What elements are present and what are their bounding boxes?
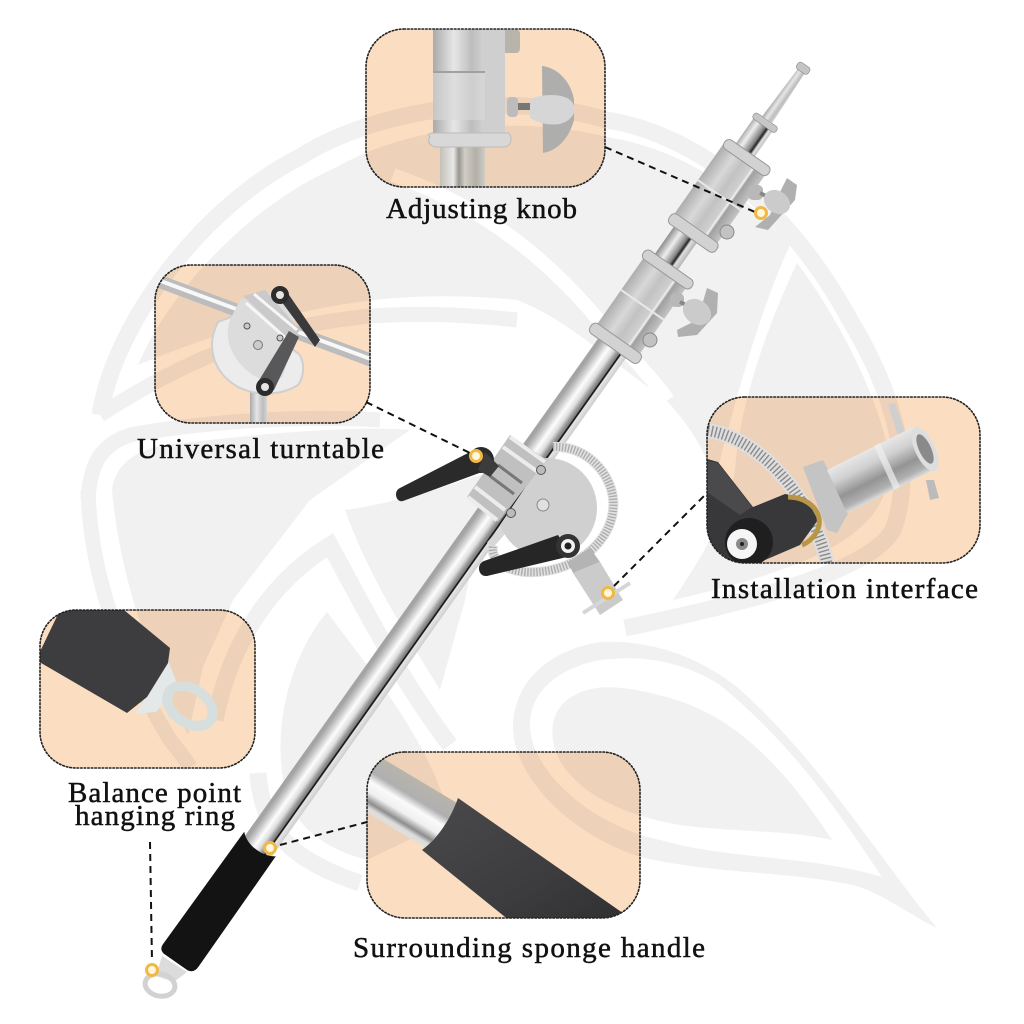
marker dots [146, 208, 766, 976]
dashed leader: sponge handle [280, 822, 367, 845]
heading: universal turntable: Universal turntable [137, 433, 384, 465]
dashed leader: adjusting knob [605, 147, 755, 212]
heading: installation interface: Installation interface [711, 573, 978, 605]
heading: balance point hanging ring: Balance point [68, 777, 241, 809]
heading: adjusting knob: Adjusting knob [386, 193, 577, 225]
dashed leader: universal turntable [366, 402, 470, 453]
turntable [467, 435, 630, 615]
adjusting knob lower [643, 288, 718, 347]
heading: balance point hanging ring: hanging ring [75, 800, 235, 832]
telescopic pole [156, 50, 833, 982]
dashed leader: installation interface [614, 493, 707, 586]
dashed leader: hanging ring [150, 842, 152, 962]
lever upper [396, 447, 499, 501]
panel: universal turntable [150, 265, 376, 426]
clamp flanges [587, 135, 774, 365]
heading: surrounding sponge handle: Surrounding sponge handle [353, 932, 705, 964]
panel: surrounding sponge handle [366, 751, 641, 919]
boom arm [143, 50, 833, 999]
panel: balance point hanging ring [36, 610, 255, 768]
foam grip [159, 831, 277, 974]
watermark logo [88, 105, 937, 928]
lever lower [479, 534, 580, 576]
hanging ring [143, 956, 187, 999]
adjusting knob upper [720, 178, 797, 239]
heading: balance point hanging ring [68, 777, 241, 832]
panel: installation interface [704, 397, 980, 568]
panel: adjusting knob [366, 25, 605, 190]
